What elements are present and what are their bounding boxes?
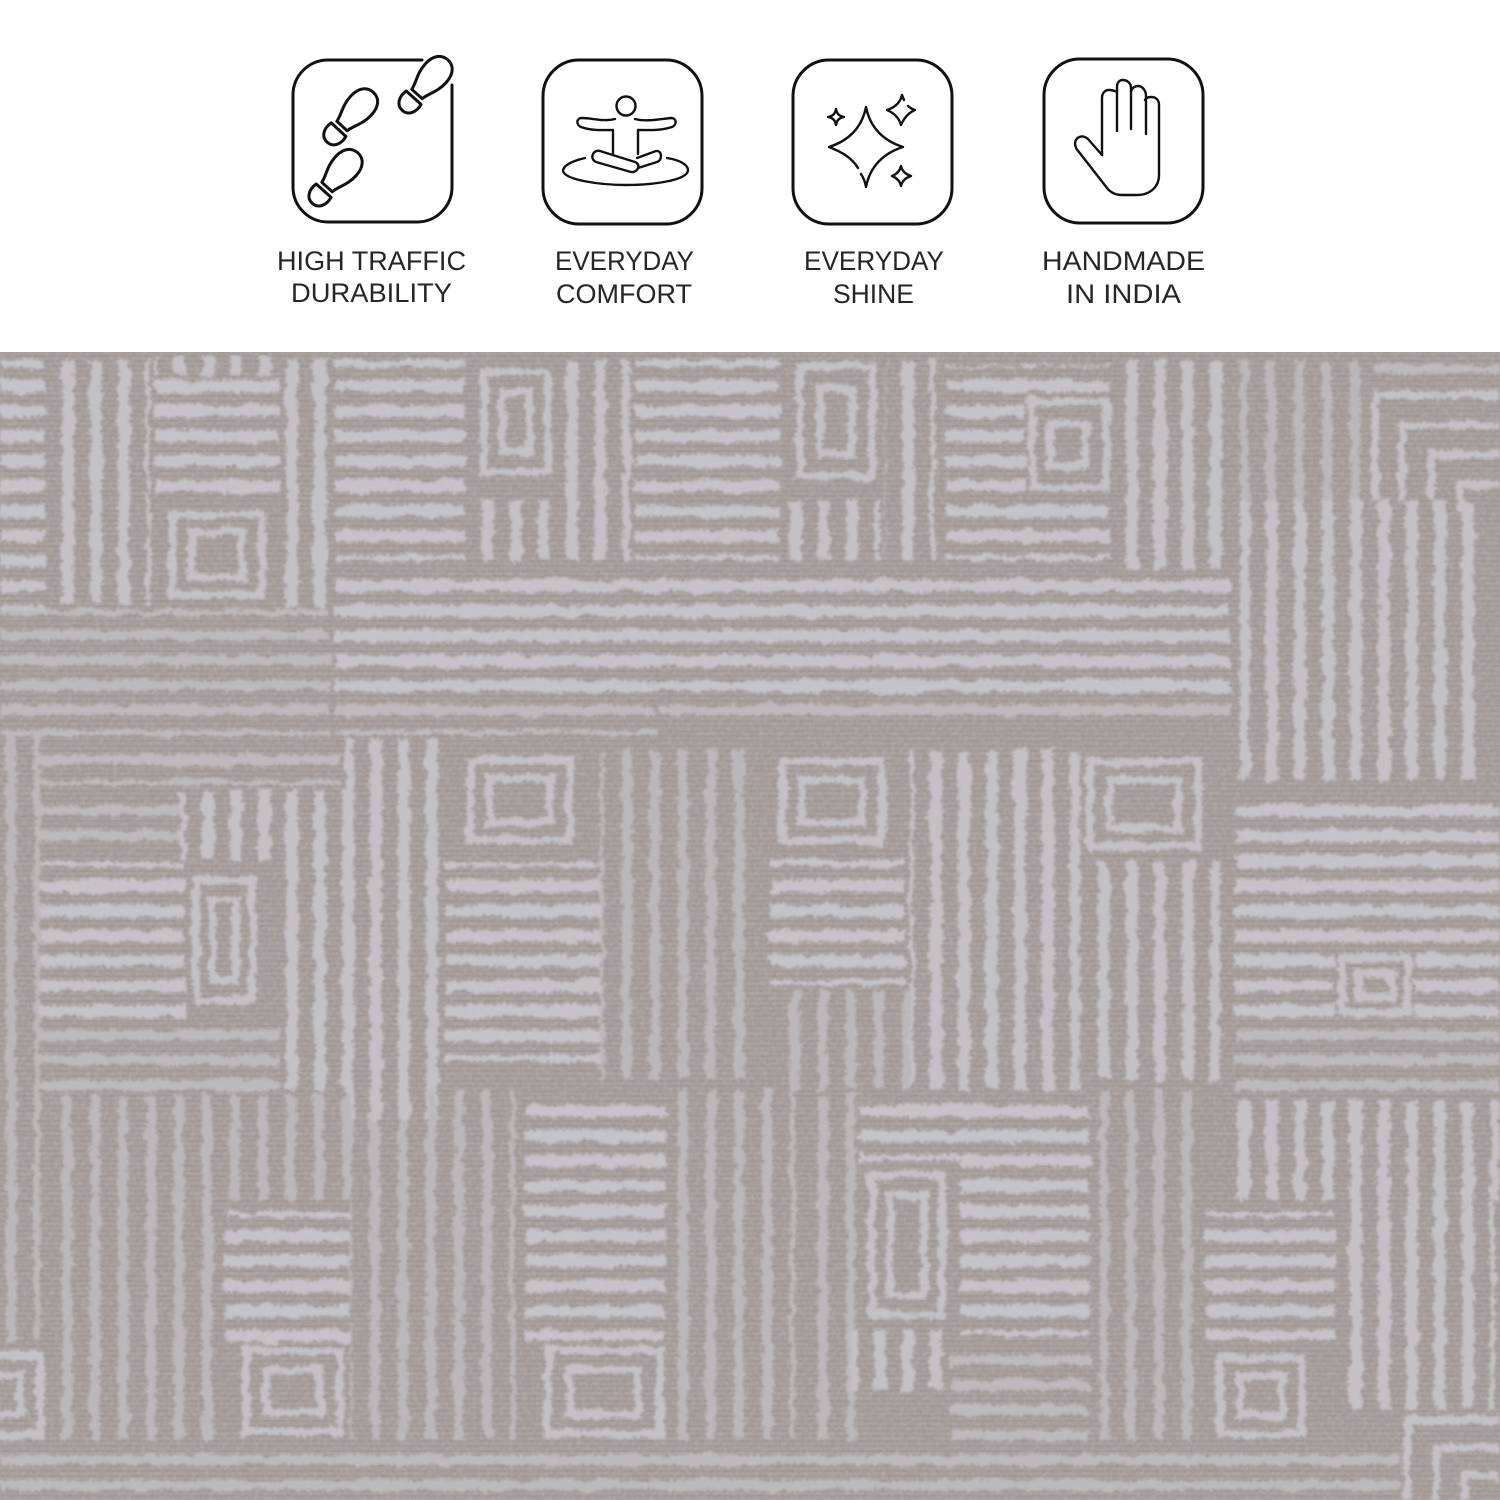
- label: high traffic durability: HIGH TRAFFIC: [277, 246, 466, 276]
- label: everyday comfort: COMFORT: [556, 279, 692, 309]
- icon: sparkles in rounded square: [793, 60, 952, 224]
- middle block row: [0, 730, 40, 1340]
- icon: footprints in rounded square: [293, 50, 458, 222]
- label: everyday comfort: EVERYDAY: [555, 246, 694, 276]
- icon: raised hand in rounded square: [1044, 59, 1203, 223]
- label: everyday comfort: [555, 246, 694, 309]
- horizontal band: [0, 610, 330, 735]
- icon: seated person on mat in rounded square: [543, 60, 702, 224]
- label: everyday shine: [804, 246, 944, 309]
- feature icon: everyday shine: [793, 60, 952, 309]
- label: handmade in india: HANDMADE: [1042, 246, 1205, 276]
- rug texture panel: [0, 352, 1500, 1500]
- feature icon: everyday comfort: [543, 60, 702, 309]
- label: everyday shine: SHINE: [833, 279, 914, 309]
- label: handmade in india: IN INDIA: [1066, 279, 1181, 309]
- top block row: [0, 360, 45, 610]
- label: high traffic durability: [277, 246, 466, 308]
- label: everyday shine: EVERYDAY: [804, 246, 944, 276]
- feature icon: high traffic durability: [277, 50, 466, 308]
- feature icon: handmade in india: [1042, 59, 1205, 309]
- label: handmade in india: [1042, 246, 1205, 309]
- label: high traffic durability: DURABILITY: [291, 278, 452, 308]
- motifs in top row: [172, 366, 1500, 595]
- bottom block row: [50, 1095, 350, 1200]
